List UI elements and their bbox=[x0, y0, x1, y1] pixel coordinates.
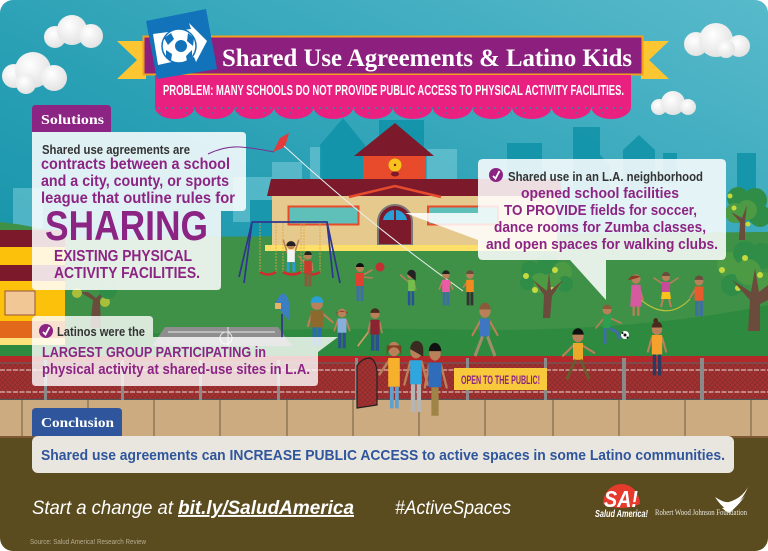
conclusion tab bbox=[32, 408, 122, 436]
title ribbon bbox=[117, 36, 669, 79]
girl in orange bbox=[648, 318, 666, 376]
open to the public sign: OPEN TO THE PUBLIC! bbox=[461, 375, 540, 387]
logo: Salud America: SA! bbox=[604, 486, 638, 512]
callout: shared use in L.A.: and open spaces for walking clubs. bbox=[486, 236, 718, 253]
callout: shared use in L.A.: opened school facilities bbox=[521, 185, 679, 202]
call to action bbox=[32, 498, 354, 519]
basketball hoop bbox=[275, 294, 289, 338]
icon: soccer ball stamp bbox=[146, 9, 217, 79]
panel: solutions: and a city, county, or sports bbox=[41, 173, 229, 190]
basketball court bbox=[152, 327, 292, 346]
main school bbox=[265, 123, 562, 251]
callout: latinos: physical activity at shared-use sites in L.A. bbox=[42, 361, 310, 378]
panel: solutions: contracts between a school bbox=[41, 156, 230, 173]
ground bbox=[0, 437, 768, 551]
conclusion box bbox=[32, 436, 734, 473]
city skyline bbox=[13, 118, 756, 240]
callout: latinos: Latinos were the bbox=[57, 325, 145, 339]
callout: latinos: LARGEST GROUP PARTICIPATING in bbox=[42, 344, 266, 361]
tree: right upper bbox=[725, 187, 768, 240]
tree: center bbox=[520, 254, 573, 318]
hashtag: #ActiveSpaces bbox=[395, 498, 511, 519]
girl in light blue bbox=[334, 309, 350, 348]
panel: conclusion: Shared use agreements can INCREASE PUBLIC ACCESS to active spaces in some Latino communities. bbox=[41, 447, 725, 464]
panel: conclusion bbox=[32, 408, 734, 473]
kids playing bbox=[283, 240, 703, 379]
problem banner bbox=[155, 75, 631, 119]
logo: Salud America: Salud America! bbox=[595, 509, 648, 520]
woman in yellow bbox=[380, 342, 401, 408]
call to action: bit.ly/SaludAmerica bbox=[178, 498, 354, 519]
boy with bat bbox=[358, 308, 382, 351]
swing set bbox=[239, 222, 340, 283]
logo: Robert Wood Johnson Foundation: Robert Wood Johnson Foundation bbox=[655, 508, 747, 517]
conclusion tab: Conclusion bbox=[41, 416, 114, 431]
track and fence bbox=[0, 356, 768, 400]
panel: solutions: EXISTING PHYSICAL bbox=[54, 248, 192, 265]
solutions box bbox=[32, 132, 246, 290]
girl jumping rope left bbox=[628, 274, 643, 316]
callout: shared use in L.A.: Shared use in an L.A. neighborhood bbox=[508, 169, 703, 184]
panel: solutions: ACTIVITY FACILITIES. bbox=[54, 265, 200, 282]
tree: right lower bbox=[717, 241, 768, 331]
sharing headline: SHARING bbox=[45, 202, 208, 249]
sky background bbox=[0, 0, 768, 238]
girl in green bbox=[401, 270, 416, 305]
callout: shared use in L.A.: TO PROVIDE fields for soccer, bbox=[504, 202, 697, 219]
soccer kid bbox=[596, 304, 621, 344]
girl in pink bbox=[439, 270, 453, 305]
icon: check bbox=[489, 168, 503, 182]
green field bbox=[0, 222, 768, 337]
callout: latinos bbox=[32, 316, 338, 386]
sidewalk bbox=[0, 400, 768, 437]
solutions tab bbox=[32, 105, 111, 132]
call to action: Start a change at bbox=[32, 498, 174, 519]
solutions tab: Solutions bbox=[41, 113, 105, 128]
man in blue cap bbox=[308, 296, 333, 346]
icon: check bbox=[39, 324, 53, 338]
callout: shared use in L.A. bbox=[405, 159, 726, 300]
panel: solutions: league that outline rules for bbox=[41, 190, 235, 207]
source: Source: Salud America! Research Review bbox=[30, 539, 147, 546]
clouds bbox=[2, 15, 750, 115]
woman in blue bbox=[404, 341, 428, 412]
title text: Shared Use Agreements & Latino Kids bbox=[222, 45, 632, 72]
gate bbox=[357, 358, 377, 408]
boy with red ball bbox=[356, 263, 372, 301]
boy in yellow bbox=[563, 328, 594, 379]
boy jumping rope right bbox=[690, 276, 703, 316]
three people at gate bbox=[380, 341, 447, 416]
red ball bbox=[376, 262, 384, 272]
open to the public sign bbox=[454, 368, 547, 390]
logo: Robert Wood Johnson Foundation bbox=[655, 487, 748, 517]
left school building bbox=[0, 230, 65, 345]
solutions text: Shared use agreements are bbox=[42, 142, 190, 157]
soccer ball bbox=[621, 331, 629, 339]
boy in blue walking bbox=[472, 303, 498, 356]
kid standing by swing bbox=[298, 251, 313, 286]
kid on swing bbox=[283, 240, 299, 272]
boy in blue bbox=[425, 343, 447, 416]
boy in orange bbox=[463, 270, 474, 305]
callout: shared use in L.A.: dance rooms for Zumba classes, bbox=[494, 219, 706, 236]
panel: solutions bbox=[32, 105, 274, 290]
girl jumping bbox=[654, 272, 678, 307]
jump rope bbox=[641, 299, 690, 311]
kite bbox=[273, 133, 463, 291]
tree: left bbox=[72, 288, 117, 328]
kite tail over box bbox=[208, 147, 274, 154]
logo: Salud America bbox=[595, 484, 648, 520]
